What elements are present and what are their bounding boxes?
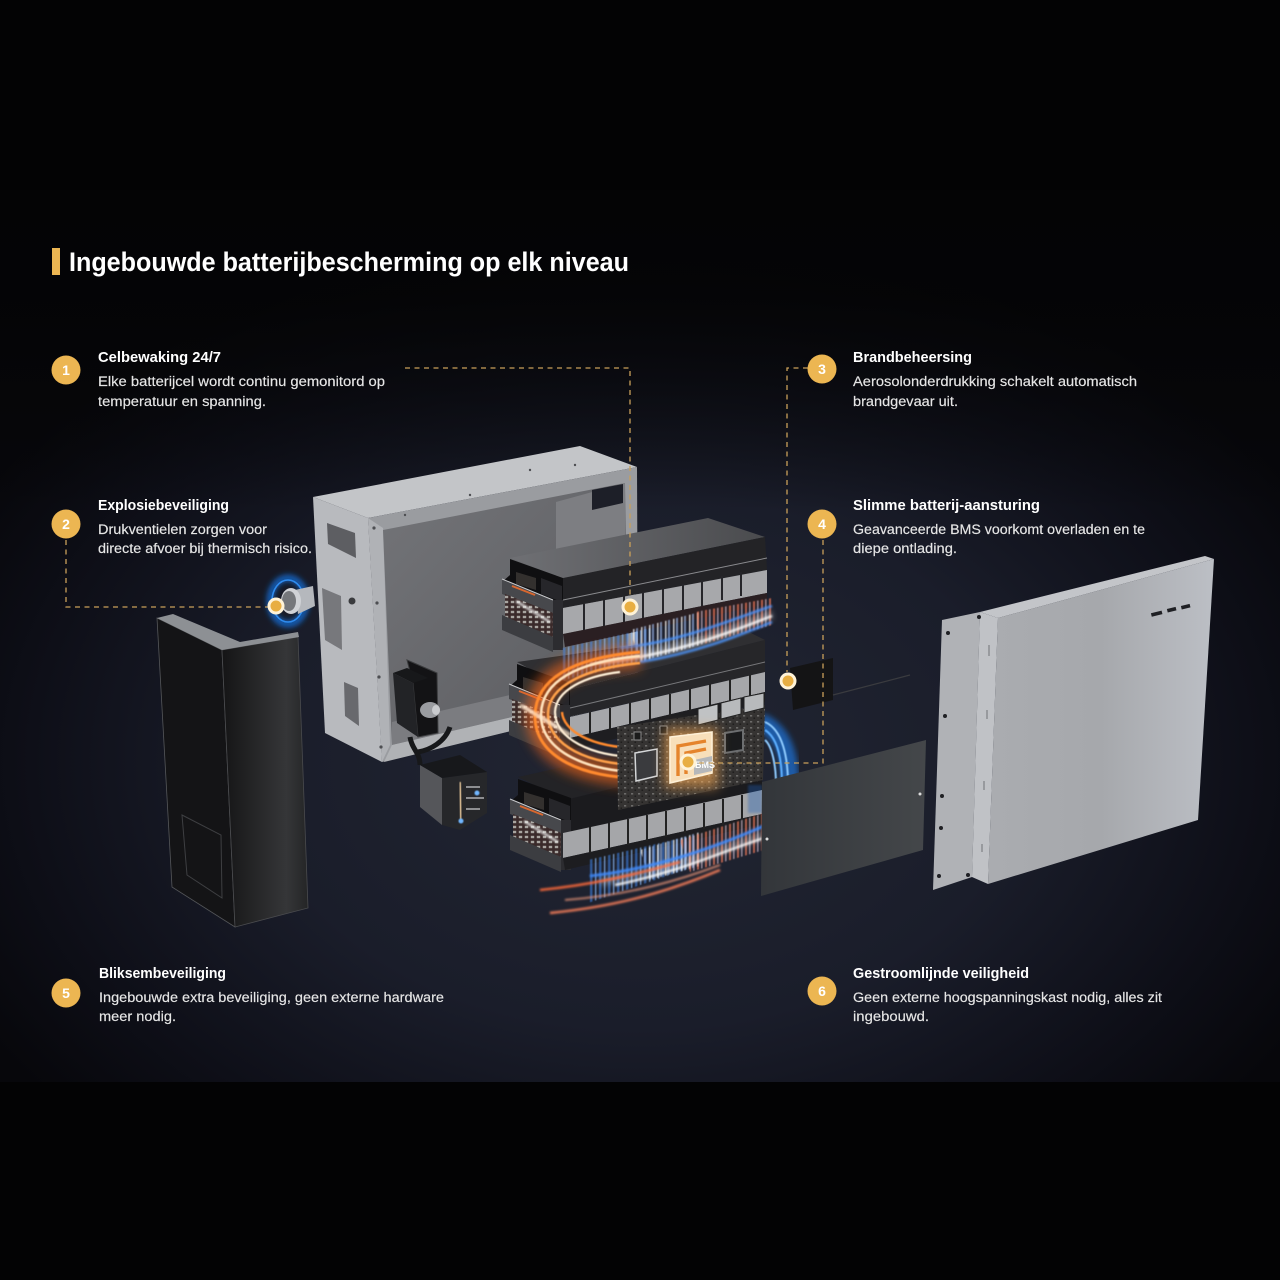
illustration: lower energy flow bbox=[540, 813, 764, 913]
callout 2: Explosiebeveiliging: Drukventielen zorgen voor bbox=[98, 522, 268, 537]
illustration: battery module 2 bbox=[509, 630, 765, 757]
callout 1: Celbewaking bbox=[52, 349, 385, 409]
illustration: BMS circuit board: BMS bbox=[695, 760, 715, 770]
callout 2: Explosiebeveiliging: 2 bbox=[62, 516, 70, 532]
callout 3: Brandbeheersing: Brandbeheersing bbox=[853, 349, 972, 366]
callout 4: Slimme batterij-aansturing bbox=[808, 497, 1145, 556]
illustration: translucent insulating plate bbox=[761, 740, 926, 896]
callout 5: Bliksembeveiliging: meer nodig. bbox=[99, 1009, 176, 1024]
illustration: orange energy arcs bbox=[520, 652, 640, 778]
callout 5: Bliksembeveiliging: Ingebouwde extra beveiliging, geen externe hardware bbox=[99, 990, 444, 1005]
callout 6: Gestroomlijnde veiligheid: Geen externe hoogspanningskast nodig, alles zit bbox=[853, 990, 1162, 1005]
callout 2: Explosiebeveiliging: Explosiebeveiliging bbox=[98, 497, 229, 514]
leader line 2 bbox=[66, 540, 268, 607]
marker on pressure valve bbox=[268, 598, 284, 614]
callout 4: Slimme batterij-aansturing: Slimme batterij-aansturing bbox=[853, 497, 1040, 514]
marker on controller bbox=[780, 672, 796, 690]
leader line 4 bbox=[698, 540, 823, 763]
callout 6: Gestroomlijnde veiligheid: Gestroomlijnde veiligheid bbox=[853, 965, 1029, 982]
marker on BMS chip bbox=[680, 754, 696, 770]
illustration: metal enclosure bbox=[313, 446, 638, 762]
callout 5: Bliksembeveiliging: 5 bbox=[62, 985, 70, 1001]
callout 6: Gestroomlijnde veiligheid: ingebouwd. bbox=[853, 1009, 929, 1024]
illustration: breaker and surge devices bbox=[393, 660, 487, 830]
callout 6: Gestroomlijnde veiligheid: 6 bbox=[818, 983, 826, 999]
callout 3: Brandbeheersing bbox=[808, 349, 1137, 409]
callout 4: Slimme batterij-aansturing: Geavanceerde BMS voorkomt overladen en te bbox=[853, 522, 1145, 537]
callout 4: Slimme batterij-aansturing: 4 bbox=[818, 516, 826, 532]
leader line 1 bbox=[405, 368, 630, 600]
illustration: smart controller module bbox=[790, 658, 910, 710]
callout 1: Celbewaking: 1 bbox=[62, 362, 70, 378]
illustration: upper energy flow bbox=[563, 598, 772, 680]
callout 3: Brandbeheersing: 3 bbox=[818, 361, 826, 377]
title: Ingebouwde batterijbescherming op elk niveau bbox=[69, 247, 629, 277]
callout 6: Gestroomlijnde veiligheid bbox=[808, 965, 1162, 1024]
callout 3: Brandbeheersing: brandgevaar uit. bbox=[853, 394, 958, 409]
illustration: battery module 1 bbox=[502, 518, 767, 652]
callout 2: Explosiebeveiliging: directe afvoer bij thermisch risico. bbox=[98, 541, 312, 556]
illustration: battery module 3 bbox=[510, 735, 762, 872]
illustration: pressure valve bbox=[270, 578, 315, 624]
illustration: black side cover bbox=[157, 614, 308, 927]
callout 3: Brandbeheersing: Aerosolonderdrukking schakelt automatisch bbox=[853, 374, 1137, 389]
callout 4: Slimme batterij-aansturing: diepe ontlading. bbox=[853, 541, 957, 556]
illustration: front cover panel bbox=[933, 556, 1214, 890]
callout 1: Celbewaking: temperatuur en spanning. bbox=[98, 394, 266, 409]
illustration: BMS circuit board bbox=[617, 693, 765, 810]
callout 5: Bliksembeveiliging bbox=[52, 965, 444, 1024]
illustration: blue energy arcs bbox=[748, 722, 790, 813]
callout 1: Celbewaking: Celbewaking 24/7 bbox=[98, 349, 221, 366]
leader line 3 bbox=[787, 368, 808, 672]
marker on battery cell bbox=[622, 598, 638, 616]
callout 5: Bliksembeveiliging: Bliksembeveiliging bbox=[99, 965, 226, 982]
callout 2: Explosiebeveiliging bbox=[52, 497, 312, 556]
callout 1: Celbewaking: Elke batterijcel wordt continu gemonitord op bbox=[98, 374, 385, 389]
